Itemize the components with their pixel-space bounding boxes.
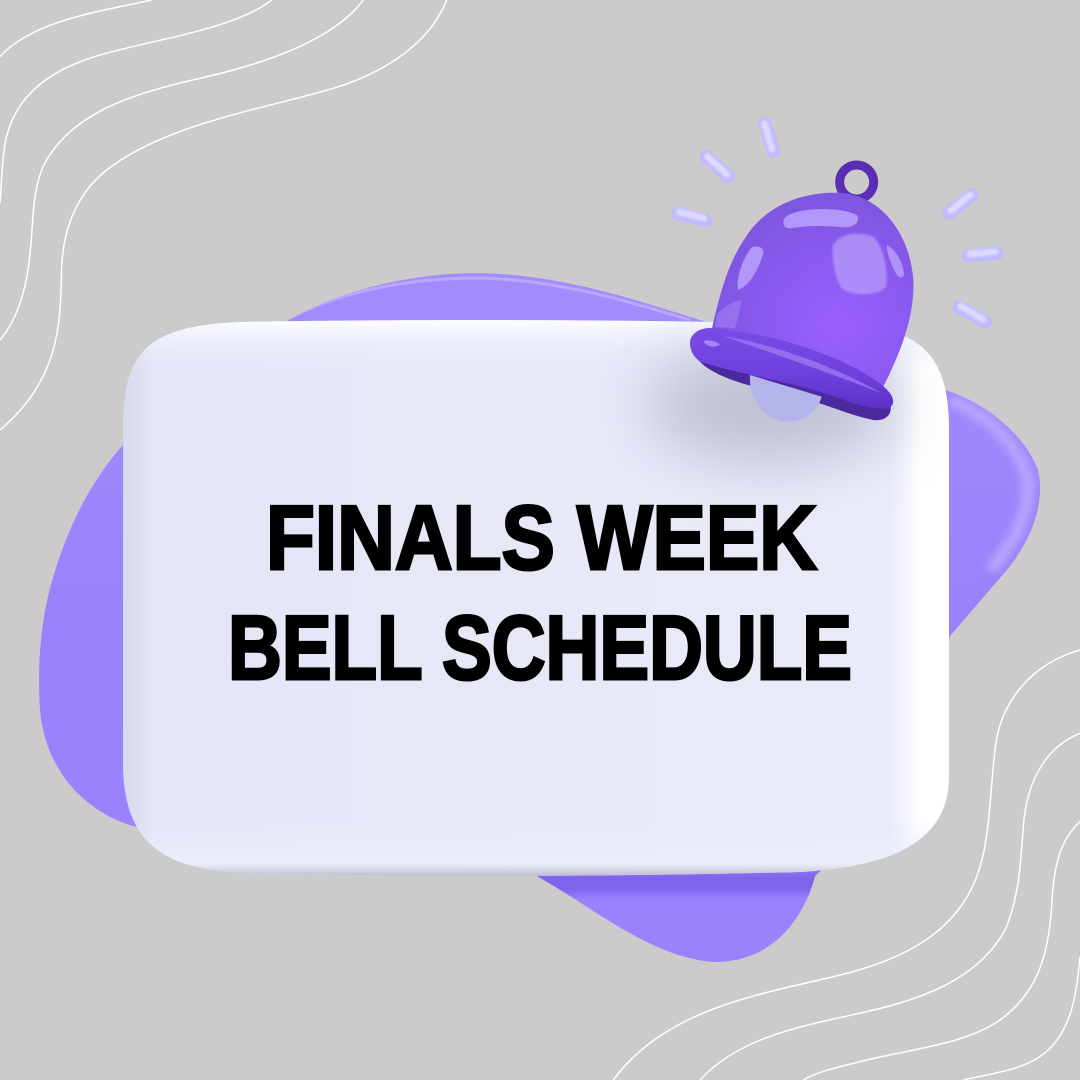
decorative wavy lines: bottom right [613,650,1080,1080]
bell rim underside [697,353,891,420]
title text: BELL SCHEDULE [228,598,852,699]
purple blob behind card [39,273,1040,962]
title text [228,488,852,699]
bell loop [840,165,874,199]
white rounded card [123,319,949,877]
icon: notification bell [678,123,997,422]
title text: FINALS WEEK [266,488,817,589]
bell rim [690,328,893,409]
decorative wavy lines: top left [0,0,447,430]
bell highlights [715,209,904,328]
bell clapper [750,375,822,422]
bell sparks [678,123,997,322]
bell rim highlights [703,336,882,393]
bell body [712,193,913,387]
